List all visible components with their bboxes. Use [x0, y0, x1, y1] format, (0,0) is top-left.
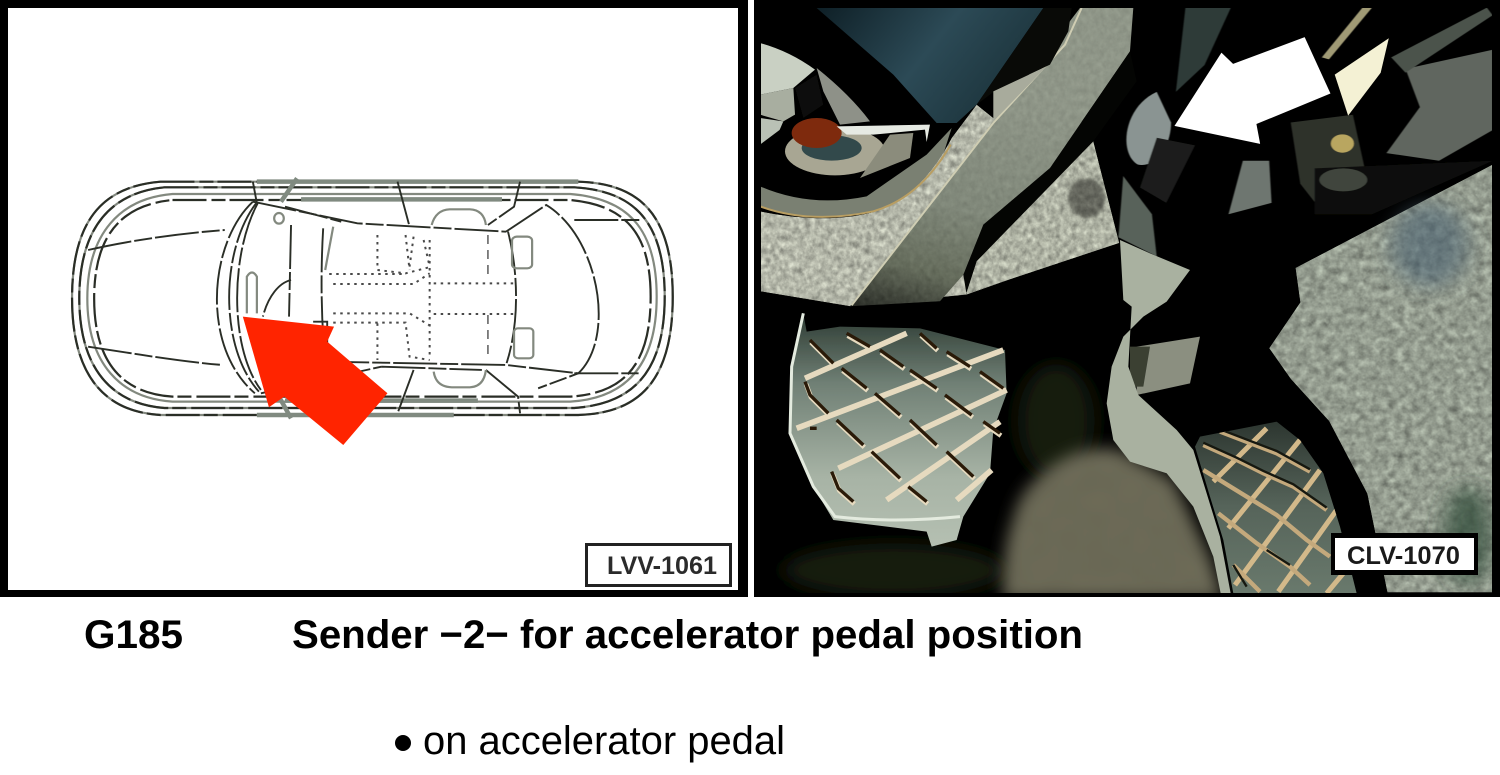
floor carpet shadow [783, 364, 1095, 597]
floor disc and bolt [760, 43, 952, 217]
trim darker face [850, 8, 1133, 306]
icon: white location arrow [1173, 36, 1331, 145]
car top-view line drawing [72, 178, 673, 418]
label: CLV-1070: CLV-1070 [1347, 542, 1460, 570]
pedal arm [1107, 240, 1231, 593]
mechanism behind pedal [1118, 8, 1493, 256]
photo: footwell scene [783, 8, 1493, 597]
vent slats [977, 8, 1072, 105]
dark upper panel [817, 8, 1043, 123]
lower pedal arm and accelerator pedal [1003, 240, 1360, 600]
trim carpet [761, 104, 1100, 306]
trim edge highlight [852, 8, 1082, 305]
icon: bullet [395, 735, 411, 751]
label: CLV-1070 [1331, 533, 1478, 575]
icon: red location arrow [243, 317, 387, 445]
heading: component name: Sender −2− for accelerator pedal position [292, 613, 1083, 657]
carpet side panel [1269, 165, 1493, 592]
floor patch [1003, 448, 1223, 600]
brake pedal [790, 313, 1007, 547]
text: location note: on accelerator pedal [423, 719, 785, 763]
dark gap between panels [963, 51, 1137, 295]
rim tan line [760, 145, 951, 217]
accelerator pedal [1195, 422, 1356, 593]
panel: photo of pedal area [754, 0, 1500, 600]
pedal block [1137, 337, 1200, 395]
panel: car location diagram [0, 0, 748, 597]
grey wedge panel [966, 141, 1119, 294]
label: LVV-1061 [586, 544, 730, 586]
upper-left footwell: panel, disc and trim [760, 8, 1137, 306]
cream reflective patch [1335, 38, 1389, 116]
label: LVV-1061: LVV-1061 [607, 552, 717, 580]
heading: component code: G185 [84, 613, 183, 657]
